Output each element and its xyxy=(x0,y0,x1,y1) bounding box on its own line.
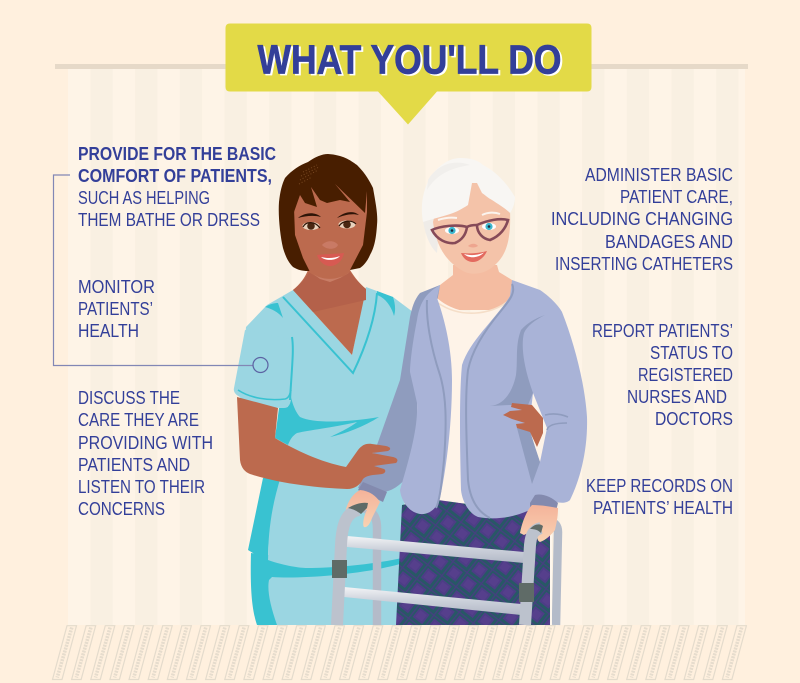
text: report status: NURSES AND xyxy=(627,386,727,407)
hair highlight xyxy=(299,165,319,184)
resident right hand xyxy=(520,505,558,542)
text: administer care: ADMINISTER BASIC xyxy=(585,164,733,185)
text: discuss care: PATIENTS AND xyxy=(78,454,190,475)
scrub waist fold xyxy=(275,368,379,445)
text: keep records: KEEP RECORDS ON xyxy=(586,475,733,496)
nurse torso xyxy=(240,287,413,568)
scrub teal side panel xyxy=(248,476,281,562)
text: provide comfort: COMFORT OF PATIENTS, xyxy=(78,165,272,186)
right grip xyxy=(530,524,543,533)
text: administer care xyxy=(551,164,733,274)
resident glasses xyxy=(432,219,508,243)
walker front left leg xyxy=(337,510,359,625)
sleeve crease xyxy=(545,414,568,430)
white gap by back leg xyxy=(550,530,552,625)
chin shading xyxy=(312,272,350,282)
title: WHAT YOU'LL DO xyxy=(258,36,562,82)
nurse head xyxy=(294,180,367,282)
text: report status: REGISTERED xyxy=(638,364,733,385)
resident back hair xyxy=(423,205,440,253)
scrub fold xyxy=(290,337,293,400)
text: provide comfort: PROVIDE FOR THE BASIC xyxy=(78,143,276,164)
nurse mouth xyxy=(317,253,344,266)
text: discuss care: CARE THEY ARE xyxy=(78,409,199,430)
text: discuss care xyxy=(78,387,213,519)
text: report status: STATUS TO xyxy=(650,342,733,363)
title shadow: WHAT YOU'LL DO xyxy=(260,38,564,84)
cardigan left panel xyxy=(400,285,452,514)
text: report status xyxy=(592,320,733,429)
walker back legs xyxy=(362,508,558,625)
cream gap inside elbow xyxy=(529,393,547,462)
cardigan right panel and sleeve xyxy=(460,280,587,518)
striped wall xyxy=(68,68,745,625)
nurse back hair xyxy=(279,154,377,271)
text: monitor health: MONITOR xyxy=(78,276,155,297)
text: keep records: PATIENTS’ HEALTH xyxy=(593,497,733,518)
text: monitor health xyxy=(78,276,155,341)
text: monitor health: HEALTH xyxy=(78,320,139,341)
leader line bracket xyxy=(54,175,268,372)
cuff left xyxy=(358,482,387,502)
nurse bangs xyxy=(290,158,368,213)
right cuff xyxy=(530,494,558,515)
skirt xyxy=(396,498,552,625)
resident left hand xyxy=(345,490,380,527)
text: provide comfort: THEM BATHE OR DRESS xyxy=(78,209,260,230)
text: administer care: PATIENT CARE, xyxy=(620,186,733,207)
text: discuss care: PROVIDING WITH xyxy=(78,432,213,453)
walker clamps xyxy=(332,560,347,578)
text: monitor health: PATIENTS’ xyxy=(78,298,153,319)
resident head xyxy=(433,181,510,274)
resident white hair xyxy=(422,158,515,222)
walker horizontal bars xyxy=(347,536,524,563)
text: keep records xyxy=(586,475,733,518)
nurse pants xyxy=(251,553,400,625)
cardigan shadow below hand xyxy=(517,428,540,484)
nurse nose xyxy=(322,241,338,249)
curtain rod xyxy=(55,64,748,69)
nurse sleeve xyxy=(234,330,296,408)
text: report status: DOCTORS xyxy=(655,408,733,429)
inner blouse xyxy=(437,296,512,505)
walker front right leg xyxy=(525,528,541,625)
text: provide comfort: SUCH AS HELPING xyxy=(78,187,210,208)
striped floor xyxy=(52,626,746,680)
walker xyxy=(332,490,558,625)
resident eyes xyxy=(438,213,500,234)
text: administer care: BANDAGES AND xyxy=(605,231,733,252)
text: discuss care: CONCERNS xyxy=(78,498,165,519)
figure: resident xyxy=(358,158,587,625)
text: discuss care: LISTEN TO THEIR xyxy=(78,476,205,497)
scrub collar xyxy=(283,293,377,373)
neck xyxy=(435,265,520,310)
nurse arm and hand xyxy=(237,397,397,489)
text: administer care: INCLUDING CHANGING xyxy=(551,208,733,229)
nurse eyes and brows xyxy=(298,212,359,230)
figure: nurse xyxy=(234,154,413,625)
text: report status: REPORT PATIENTS’ xyxy=(592,320,733,341)
left grip xyxy=(348,503,368,514)
collar shoulder wedges xyxy=(265,291,395,318)
text: discuss care: DISCUSS THE xyxy=(78,387,180,408)
title banner xyxy=(226,24,592,124)
hand behind back xyxy=(503,403,543,447)
text: administer care: INSERTING CATHETERS xyxy=(555,253,733,274)
resident nose xyxy=(468,244,478,248)
cardigan shadow above hand xyxy=(490,315,545,406)
resident far sleeve xyxy=(358,285,440,492)
text: provide comfort xyxy=(78,143,276,230)
cardigan folds xyxy=(427,284,513,518)
resident mouth xyxy=(461,251,487,262)
neck and chest xyxy=(293,262,366,355)
